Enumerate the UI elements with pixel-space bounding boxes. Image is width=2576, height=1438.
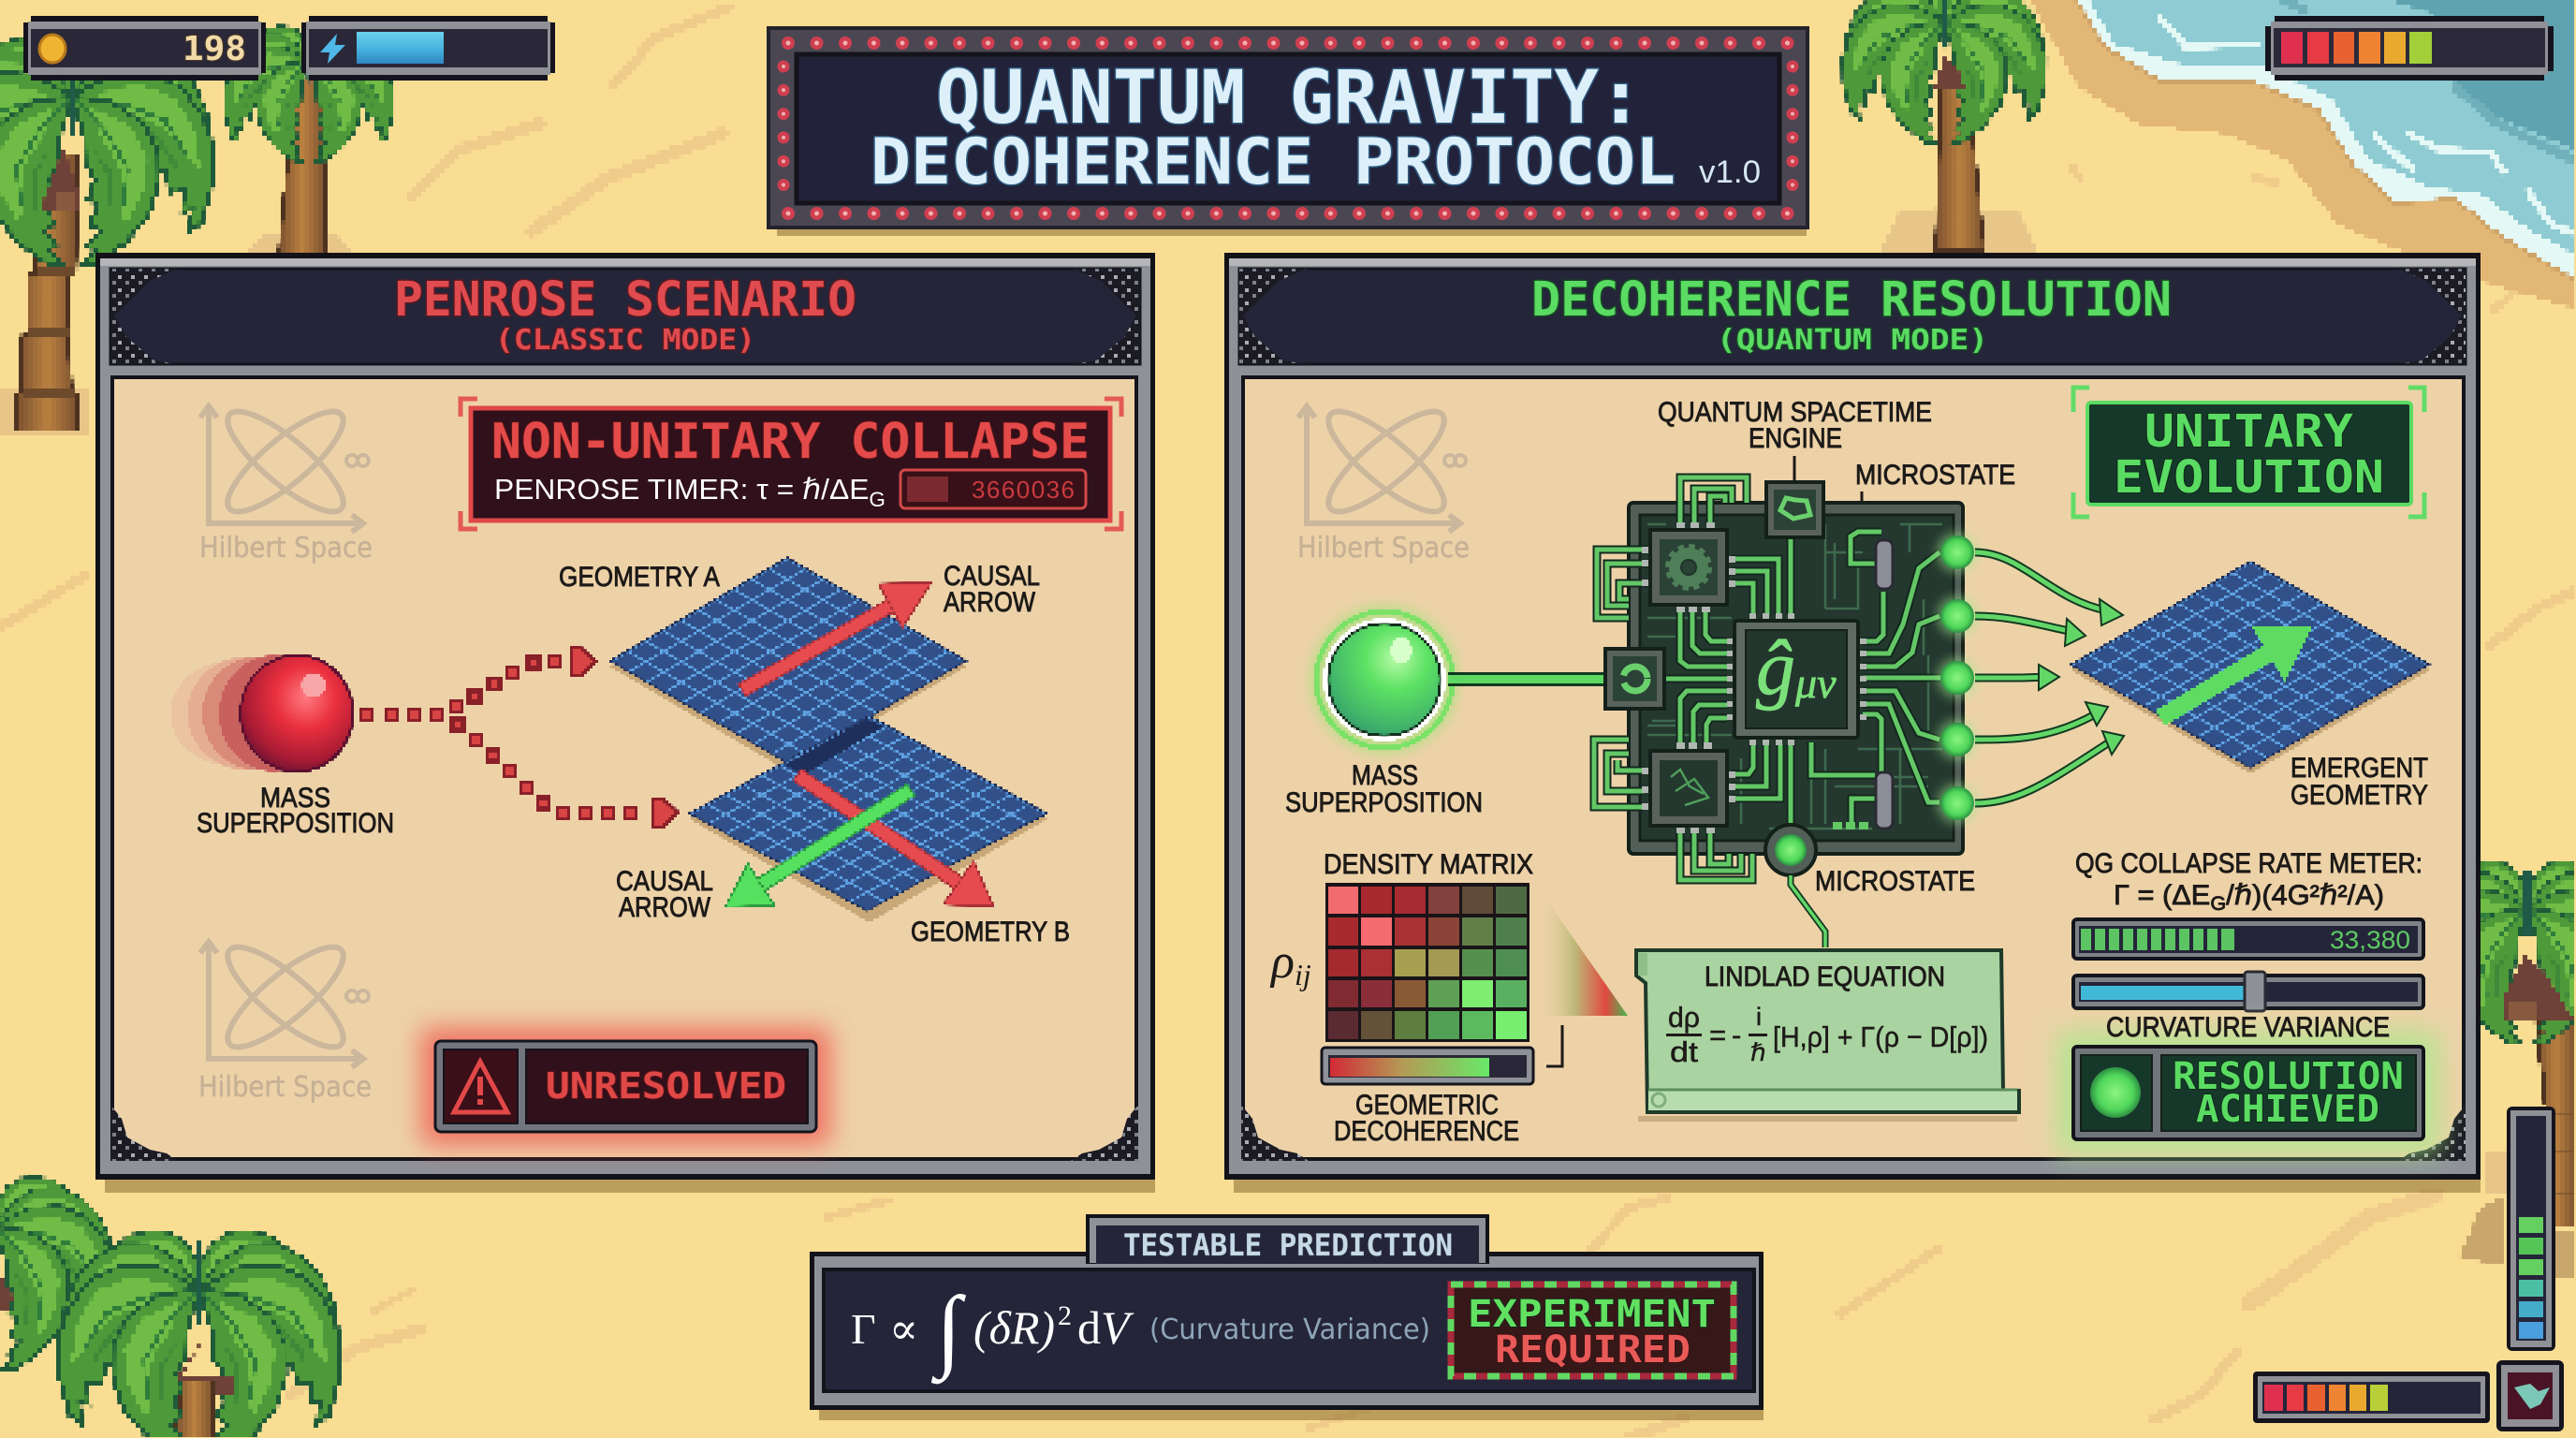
ocean shoreline <box>2030 0 2576 309</box>
Penrose timer formula: PENROSE TIMER: τ = ℏ/ΔE <box>494 473 860 506</box>
label: rho ij: ρ <box>1271 935 1295 989</box>
formula: Γ <box>851 1305 876 1353</box>
gauge: collapse rate meter <box>2073 919 2423 959</box>
callout: non-unitary collapse <box>461 399 1121 529</box>
label: collapse rate meter: G <box>2210 893 2226 915</box>
parchment body <box>1243 377 2464 1159</box>
arrow: causal arrow green <box>725 785 915 907</box>
status text: RESOLUTION <box>2173 1055 2404 1098</box>
connector: node to scroll <box>1791 875 1825 947</box>
icon: LED <box>2090 1067 2141 1118</box>
formula <box>851 1279 1134 1385</box>
diagram: branching geometries <box>170 558 1046 922</box>
Lindblad formula: ℏ <box>1750 1038 1765 1066</box>
label: curvature variance: CURVATURE VARIANCE <box>2106 1012 2390 1043</box>
scroll: Lindblad equation <box>1636 950 2019 1122</box>
callout: unitary evolution <box>2073 388 2424 517</box>
chip: main metric operator: μν <box>1794 659 1837 707</box>
timer readout <box>900 470 1086 508</box>
label: Hilbert Space 2: Hilbert Space <box>198 1071 372 1104</box>
coin count: 198 <box>183 30 246 68</box>
heading: DECOHERENCE RESOLUTION <box>1531 272 2172 328</box>
label: geometric decoherence <box>1334 1090 1519 1147</box>
title line 2: DECOHERENCE PROTOCOL <box>871 125 1676 199</box>
title line 1: QUANTUM GRAVITY: <box>936 56 1643 140</box>
Lindblad formula: i <box>1756 1003 1762 1031</box>
energy fill <box>357 32 444 64</box>
label: quantum spacetime engine: QUANTUM SPACETIME <box>1658 397 1932 428</box>
HUD: coin counter <box>23 16 266 81</box>
arrow: causal arrow A red <box>739 582 931 696</box>
header bar <box>1239 269 2466 364</box>
Lindblad formula: dρ <box>1668 1001 1700 1034</box>
output nodes <box>1938 533 1977 823</box>
label: causal arrow upper <box>944 561 1040 618</box>
label: causal arrow lower: CAUSAL <box>616 866 713 897</box>
icon: warning <box>454 1062 507 1112</box>
label: collapse rate meter <box>2075 848 2422 915</box>
Lindblad formula: dt <box>1670 1035 1698 1068</box>
label: causal arrow upper: CAUSAL <box>944 561 1040 592</box>
chip: gear <box>1642 522 1735 612</box>
callout: unitary evolution: UNITARY <box>2144 405 2353 458</box>
label: microstate top: MICROSTATE <box>1855 460 2015 491</box>
subheading: (QUANTUM MODE) <box>1717 324 1988 357</box>
label: collapse rate meter: Γ = (ΔE <box>2114 880 2208 911</box>
formula: (δR) <box>973 1301 1055 1354</box>
formula: ∝ <box>889 1305 918 1353</box>
chip: bottom left <box>1642 742 1735 833</box>
label: geometric decoherence: GEOMETRIC <box>1355 1090 1499 1121</box>
scroll title: LINDLAD EQUATION <box>1705 961 1945 992</box>
label: density matrix: DENSITY MATRIX <box>1324 849 1533 880</box>
label: mass superposition <box>197 783 394 839</box>
label: rho ij: ij <box>1295 958 1311 991</box>
formula: dV <box>1077 1301 1134 1354</box>
label: collapse rate meter: QG COLLAPSE RATE METER: <box>2075 848 2422 879</box>
Lindblad formula: - <box>1732 1019 1741 1051</box>
icon: green mass <box>1310 605 1459 755</box>
palm tree: top middle <box>202 13 416 253</box>
label: mass superposition: SUPERPOSITION <box>197 808 394 839</box>
callout: unitary evolution: EVOLUTION <box>2114 451 2384 504</box>
tab: testable prediction <box>1086 1214 1489 1264</box>
timer readout: 3660036 <box>972 476 1075 504</box>
label: geometry A: GEOMETRY A <box>559 562 720 593</box>
chart: density matrix heatmap <box>1325 883 1530 1042</box>
chip: main metric operator: ĝ <box>1756 624 1795 712</box>
status text <box>2173 1055 2404 1131</box>
label: causal arrow upper: ARROW <box>944 587 1036 618</box>
arrowheads: outputs <box>2039 599 2124 755</box>
HUD: energy bar <box>301 16 555 81</box>
arrow: dashed upper branch <box>360 648 595 720</box>
panel: Penrose scenario <box>95 253 1155 1193</box>
label: geometric decoherence: DECOHERENCE <box>1334 1116 1519 1147</box>
label: Hilbert Space 3: Hilbert Space <box>1297 532 1470 565</box>
formula: 2 <box>1058 1300 1072 1331</box>
Lindblad formula: [H,ρ] + Γ(ρ − D[ρ]) <box>1773 1020 1988 1053</box>
arrow: geometry B red <box>794 770 993 906</box>
icon: heart slot <box>2496 1360 2564 1431</box>
circuit traces <box>1594 477 1942 880</box>
caption: curvature variance: (Curvature Variance) <box>1149 1313 1430 1346</box>
HUD: top right health bar <box>2265 16 2554 81</box>
header bar <box>110 269 1140 364</box>
palm tree: top right <box>1816 0 2072 251</box>
label: quantum spacetime engine <box>1658 397 1932 485</box>
node: bottom output <box>1765 825 1816 875</box>
arrow: mass to engine <box>1448 672 1606 686</box>
callout: experiment required <box>1451 1284 1734 1376</box>
bar: geometric decoherence <box>1322 1048 1533 1084</box>
parchment body <box>112 377 1136 1159</box>
chip: left input <box>1605 649 1664 709</box>
heading: PENROSE SCENARIO <box>394 272 856 328</box>
arrows: outputs to emergent geometry <box>1975 552 2114 803</box>
label: emergent geometry: EMERGENT <box>2291 753 2428 784</box>
panel: Decoherence resolution <box>810 253 2564 1431</box>
Lindblad formula: = <box>1709 1019 1726 1051</box>
label: emergent geometry: GEOMETRY <box>2291 780 2428 811</box>
label: Hilbert Space 1: Hilbert Space <box>199 532 373 565</box>
palm tree: right <box>2385 844 2576 1276</box>
panel: testable prediction <box>810 1214 1764 1420</box>
HUD: bottom health bar <box>2253 1372 2490 1423</box>
Penrose timer formula: G <box>869 488 886 511</box>
chip: top <box>1766 482 1823 537</box>
leader line <box>1546 1025 1562 1066</box>
icon: lightning bolt <box>320 34 345 64</box>
icon: Hilbert space 2 <box>200 932 369 1067</box>
label: geometry B: GEOMETRY B <box>911 917 1070 947</box>
version tag: v1.0 <box>1699 154 1761 190</box>
gauge: collapse rate meter: 33,380 <box>2330 926 2410 954</box>
corner ornaments <box>1241 1105 2466 1161</box>
label: causal arrow lower: ARROW <box>619 892 711 923</box>
diagram: geometry A sheet <box>610 558 966 770</box>
status text: UNRESOLVED <box>546 1065 786 1107</box>
arrow: dashed lower branch <box>452 719 678 827</box>
palm tree: bottom left back <box>0 1158 146 1374</box>
label: microstate bottom: MICROSTATE <box>1815 866 1975 897</box>
label: mass superposition right: MASS <box>1352 760 1418 791</box>
status glow: resolution achieved <box>2057 1032 2439 1153</box>
icon: coin <box>39 35 66 63</box>
decoherence wedge <box>1540 890 1628 1016</box>
diagram: emergent geometry <box>2071 562 2429 773</box>
label: causal arrow lower <box>616 866 713 923</box>
status text: ACHIEVED <box>2196 1088 2379 1131</box>
callout: experiment required: REQUIRED <box>1495 1328 1690 1372</box>
subheading: (CLASSIC MODE) <box>495 324 755 357</box>
icon: Hilbert space 1 <box>200 397 369 532</box>
tab: testable prediction: TESTABLE PREDICTION <box>1123 1227 1453 1263</box>
chart: quantum spacetime engine board <box>1269 477 2439 1153</box>
status: resolution achieved <box>2073 1047 2423 1139</box>
resistors: microstate components <box>1833 540 1893 829</box>
label: emergent geometry <box>2291 753 2428 811</box>
diagram: geometry B sheet <box>690 716 1046 922</box>
slider: curvature variance <box>2073 972 2423 1011</box>
callout: experiment required: EXPERIMENT <box>1468 1293 1716 1336</box>
corner ornaments <box>110 1105 1138 1161</box>
label: mass superposition: MASS <box>260 783 330 814</box>
title marquee <box>768 28 1808 236</box>
palm tree: bottom left front <box>22 1210 377 1438</box>
label: quantum spacetime engine: ENGINE <box>1749 423 1842 454</box>
chip: main metric operator <box>1727 613 1866 745</box>
status: unresolved <box>421 1028 830 1145</box>
label: mass superposition right: SUPERPOSITION <box>1285 787 1483 818</box>
label: mass superposition right <box>1285 760 1483 818</box>
HUD: vertical power bar <box>2507 1107 2555 1351</box>
Lindblad formula <box>1666 1001 1988 1068</box>
icon: Hilbert space 3 <box>1298 397 1466 532</box>
palm tree: top left <box>0 17 250 435</box>
label: collapse rate meter: /ℏ)(4G²ℏ²/A) <box>2226 880 2384 911</box>
callout heading: NON-UNITARY COLLAPSE <box>491 414 1090 470</box>
icon: red mass with trail <box>170 655 353 771</box>
formula: ∫ <box>930 1279 966 1385</box>
